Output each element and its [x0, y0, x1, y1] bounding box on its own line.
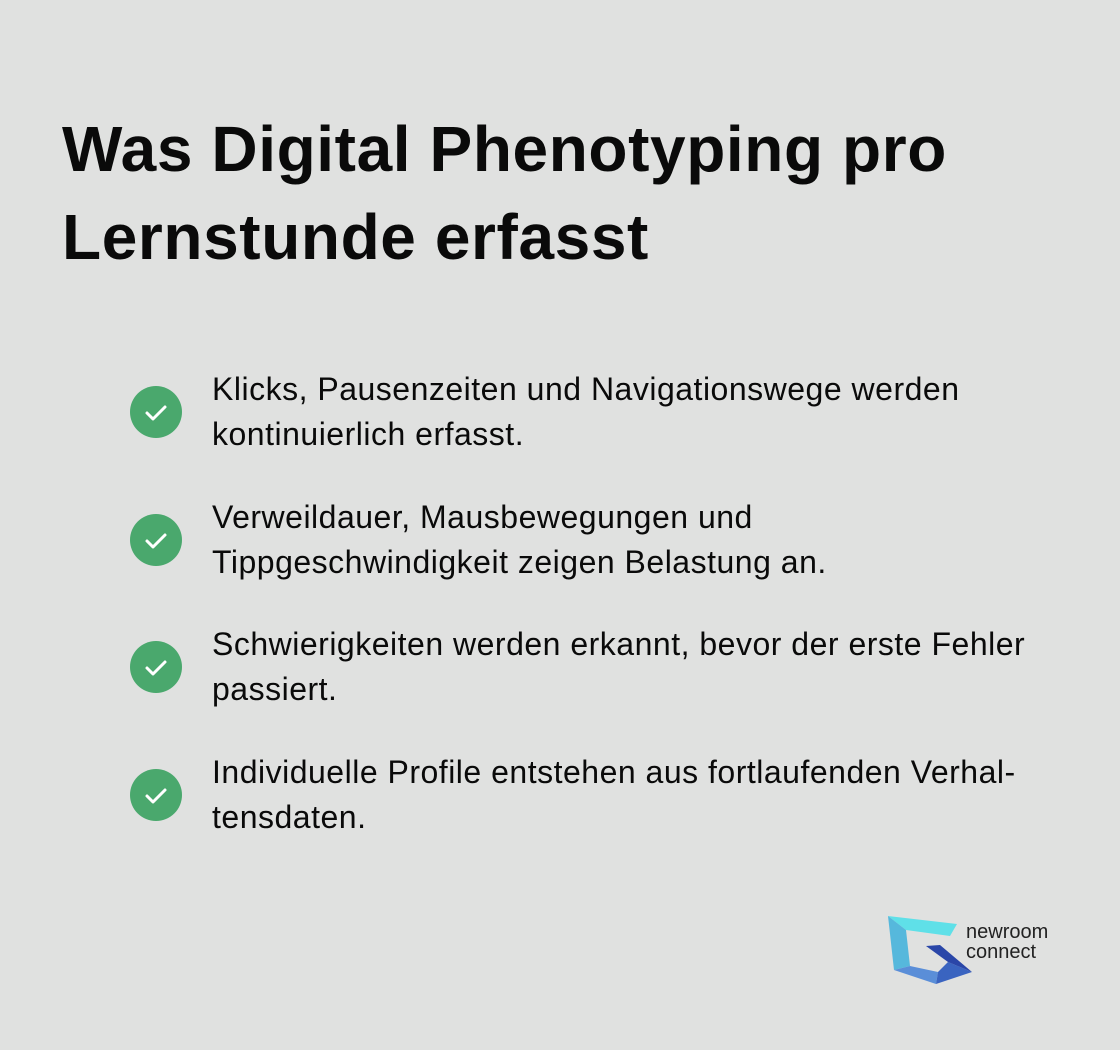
icon: check — [130, 514, 182, 566]
text 3: Schwierigkeiten werden erkannt, bevor der erste Fehler — [212, 626, 1025, 662]
item 2 — [130, 499, 827, 580]
title: Lernstunde erfasst — [62, 201, 649, 273]
item 1 — [130, 371, 959, 452]
logo — [888, 916, 1048, 984]
text 4: Individuelle Profile entstehen aus fortlaufenden Verhal- — [212, 754, 1016, 790]
text 3: passiert. — [212, 671, 337, 707]
logo: newroom — [966, 921, 1048, 943]
icon: check — [130, 641, 182, 693]
text 4 — [212, 754, 1016, 835]
item 3 — [130, 626, 1025, 707]
icon: check — [130, 386, 182, 438]
text 4: tensdaten. — [212, 799, 366, 835]
text 2: Tippgeschwindigkeit zeigen Belastung an. — [212, 544, 827, 580]
text 3 — [212, 626, 1025, 707]
icon: check — [130, 769, 182, 821]
item 4 — [130, 754, 1016, 835]
text 1: Klicks, Pausenzeiten und Navigationswege werden — [212, 371, 959, 407]
title: Was Digital Phenotyping pro — [62, 113, 947, 185]
text 1: kontinuierlich erfasst. — [212, 416, 524, 452]
text 2 — [212, 499, 827, 580]
logo: connect — [966, 941, 1036, 963]
title — [62, 113, 947, 273]
text 2: Verweildauer, Mausbewegungen und — [212, 499, 753, 535]
text 1 — [212, 371, 959, 452]
